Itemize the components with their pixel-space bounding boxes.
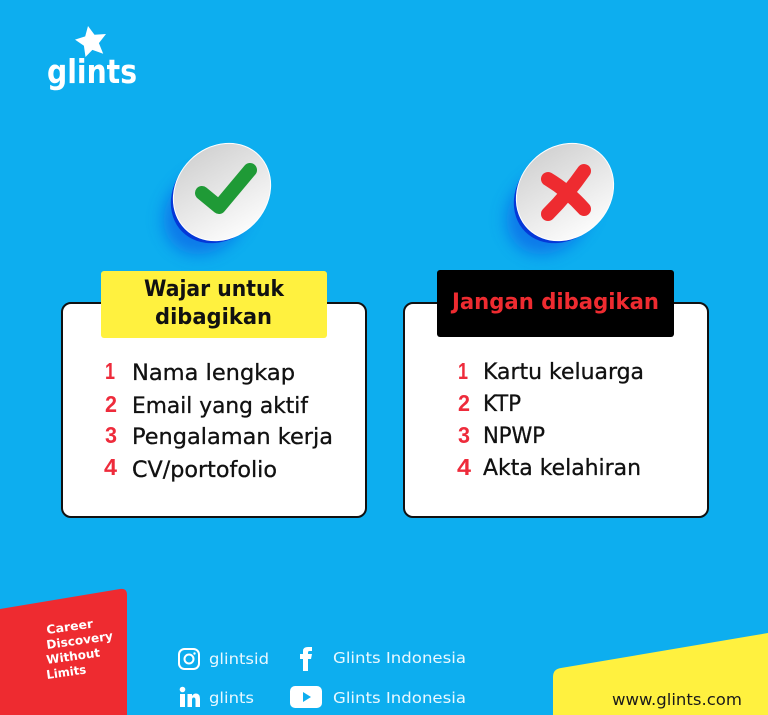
- list: wajar items: 1: [105, 358, 115, 384]
- list: jangan items: Akta kelahiran: [483, 456, 641, 481]
- heading tab: wajar: [101, 271, 327, 338]
- list: jangan items: [457, 358, 644, 481]
- heading tab: wajar: dibagikan: [155, 305, 272, 330]
- panel: wajar untuk dibagikan: [62, 271, 366, 517]
- logo wordmark: glints: [47, 52, 137, 91]
- list: jangan items: KTP: [483, 392, 521, 417]
- list: wajar items: 4: [104, 454, 117, 480]
- list: wajar items: Pengalaman kerja: [132, 425, 333, 450]
- list: jangan items: 3: [458, 422, 470, 448]
- social: linkedin: [180, 687, 254, 707]
- list: jangan items: 2: [458, 390, 470, 416]
- heading tab: jangan: [437, 270, 674, 337]
- list: jangan items: 1: [458, 358, 468, 384]
- heading tab: jangan: Jangan dibagikan: [450, 290, 659, 315]
- list: jangan items: 4: [457, 454, 471, 480]
- list: wajar items: Email yang aktif: [132, 394, 309, 419]
- list: wajar items: CV/portofolio: [132, 458, 277, 483]
- tagline text: [45, 617, 114, 682]
- icon: star: [75, 26, 106, 57]
- list: wajar items: 3: [105, 422, 117, 448]
- social: facebook: Glints Indonesia: [333, 649, 466, 667]
- heading tab: wajar: Wajar untuk: [144, 277, 285, 302]
- corner: red tagline: [0, 589, 127, 715]
- corner: yellow website: [553, 633, 768, 715]
- social: linkedin: glints: [209, 689, 254, 707]
- list: wajar items: 2: [105, 391, 117, 417]
- panel: jangan dibagikan: [404, 270, 708, 517]
- list: wajar items: Nama lengkap: [132, 361, 295, 386]
- list: jangan items: NPWP: [483, 424, 545, 449]
- tagline text: Without: [45, 646, 101, 667]
- social: youtube: [290, 686, 466, 708]
- social: facebook: [300, 647, 466, 671]
- cross mark: [548, 171, 584, 214]
- logo: glints: [47, 26, 137, 91]
- social: instagram: [179, 649, 269, 669]
- website url: www.glints.com: [612, 690, 742, 709]
- list: wajar items: [104, 358, 333, 483]
- tagline text: Career: [45, 617, 94, 637]
- tagline text: Limits: [45, 663, 87, 682]
- icon: cross disc: [490, 123, 634, 271]
- social: youtube: Glints Indonesia: [333, 689, 466, 707]
- list: jangan items: Kartu keluarga: [483, 360, 644, 385]
- social: instagram: glintsid: [209, 650, 269, 668]
- check mark: [202, 170, 250, 207]
- tagline text: Discovery: [45, 629, 114, 652]
- icon: check disc: [147, 123, 291, 271]
